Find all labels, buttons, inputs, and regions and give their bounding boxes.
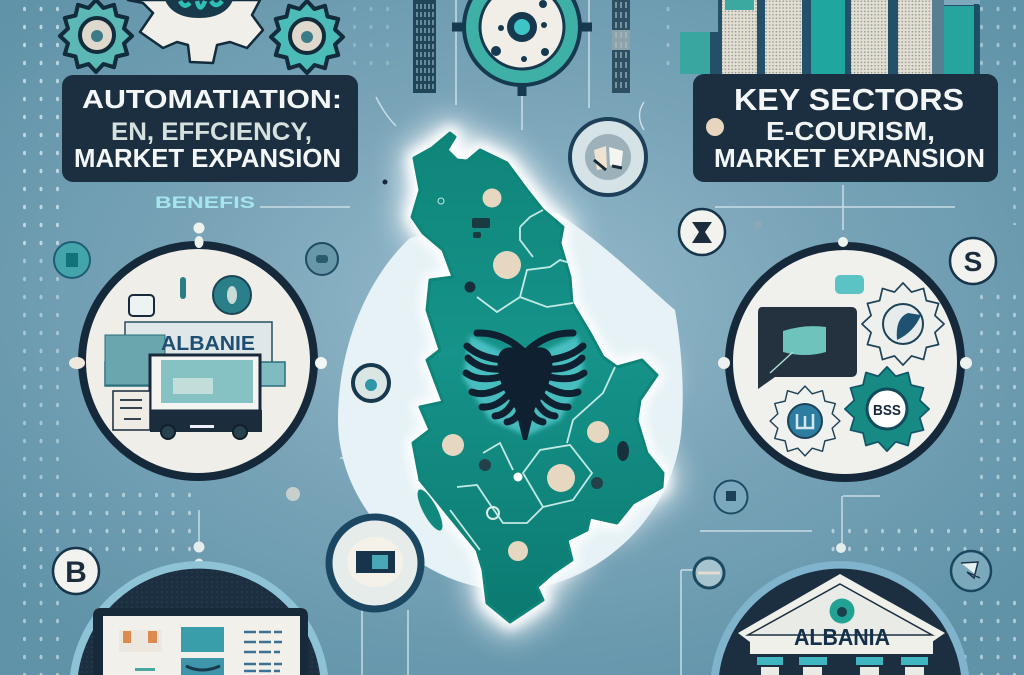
icon: screen badge: [329, 517, 421, 609]
panel: bottom right temple circle: [711, 561, 969, 675]
storefront building: ALBANIE: [161, 333, 255, 355]
icon: people badge: [570, 119, 646, 195]
panel: automation heading: AUTOMATIATION:: [82, 84, 342, 114]
connector pin: [180, 277, 186, 299]
temple pediment: ALBANIA: [794, 624, 890, 650]
barcode strip left: [413, 0, 436, 93]
teal tag icon: [835, 275, 864, 294]
decorative node dots: [194, 180, 846, 568]
icon: letter S badge: S: [964, 246, 982, 277]
icon: hourglass badge: [679, 209, 725, 255]
icon: white central gear: [128, 0, 263, 63]
teal BSS gear: BSS: [873, 402, 901, 419]
map markers: [438, 188, 629, 561]
icon: letter B badge: [53, 548, 99, 594]
panel: automation heading: MARKET EXPANSION: [74, 143, 341, 173]
icon: top centre target dial: [452, 0, 592, 96]
island: [413, 486, 447, 534]
centre glow: [338, 133, 683, 622]
icon: left teal gear: [60, 0, 132, 72]
icon: globe badge: [694, 558, 724, 588]
outline gear top right: [862, 283, 944, 365]
small camera icon: [129, 295, 154, 316]
panel: key sectors heading: [693, 74, 998, 182]
speech bubble: [758, 307, 857, 389]
panel: right circle business icons: [718, 237, 972, 478]
panel: automation heading: EN, EFFCIENCY,: [111, 118, 312, 146]
benefits label: BENEFIS: [155, 193, 255, 212]
screen tiles: [119, 627, 282, 675]
shield icon: [213, 276, 251, 314]
icon: right teal gear: [271, 1, 343, 73]
double-headed eagle: [463, 333, 585, 440]
icon: eye badge: [353, 365, 389, 401]
panel: automation heading: [62, 75, 358, 182]
temple pediment: [738, 574, 945, 654]
icon: small chat badge: [714, 480, 748, 514]
barcode strip right: [612, 0, 630, 93]
storefront building: [105, 322, 285, 386]
panel: bottom left laptop circle: [70, 561, 328, 675]
document card: [113, 391, 150, 430]
map of Albania: [412, 133, 663, 622]
outline gear bottom left: [770, 386, 840, 456]
panel: left circle Albania storefront: [69, 222, 327, 477]
temple columns: [757, 657, 928, 675]
regional borders: [450, 210, 615, 550]
panel: key sectors heading: E-COURISM,: [766, 116, 935, 146]
laptop: [150, 355, 262, 439]
icon: letter B badge: B: [65, 556, 87, 589]
icon: arrows badge: [951, 551, 991, 591]
panel: key sectors heading: MARKET EXPANSION: [714, 143, 985, 173]
icon: teal badge left: [54, 242, 90, 278]
icon: small device badge: [306, 243, 338, 275]
map landmass: [412, 133, 663, 622]
panel: key sectors heading: KEY SECTORS: [734, 82, 964, 117]
teal BSS gear: [845, 367, 929, 451]
bar chart: [680, 0, 980, 74]
connector lines: [199, 0, 955, 675]
icon: letter S badge: [950, 238, 996, 284]
